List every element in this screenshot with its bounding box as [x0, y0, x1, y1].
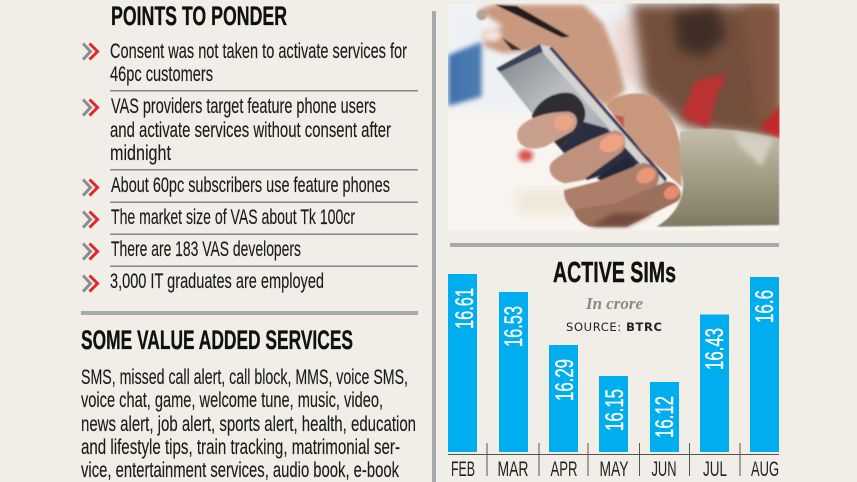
- bar: MAR: [499, 292, 528, 452]
- axis labels: MAR: [498, 458, 528, 481]
- sleeve: [657, 129, 779, 227]
- point: VAS providers: VAS providers target feature phone users: [111, 95, 376, 118]
- point: consent: 46pc customers: [110, 63, 213, 86]
- point: consent: Consent was not taken to activate services for: [110, 40, 407, 63]
- bar: JUL: 16.43: [701, 328, 729, 370]
- lower palm: [607, 93, 682, 187]
- fingers: [517, 112, 577, 149]
- panel: points to ponder: [83, 1, 418, 293]
- point: market size: [83, 206, 355, 229]
- point: developers: There are 183 VAS developers: [111, 238, 301, 261]
- bar: MAY: [599, 376, 629, 452]
- bar: JUN: 16.12: [651, 396, 679, 438]
- text block: services list: voice chat, game, welcome tune, music, video,: [81, 389, 383, 412]
- point: VAS providers: midnight: [110, 142, 171, 165]
- text block: services list: [81, 366, 416, 482]
- bar: JUL: [700, 314, 729, 452]
- text block: services list: news alert, job alert, sports alert, health, education: [81, 413, 416, 436]
- panel: some value added services: [81, 325, 416, 482]
- nails: [554, 114, 574, 131]
- photo: hands holding a smartphone: [448, 3, 782, 231]
- text block: services list: and lifestyle tips, train tracking, matrimonial ser-: [81, 436, 400, 459]
- phone: [496, 44, 667, 198]
- chart title: ACTIVE SIMs: [553, 257, 676, 289]
- bar: APR: [549, 345, 579, 452]
- axis labels: JUL: [703, 458, 727, 481]
- point: developers: [83, 238, 301, 261]
- point: market size: The market size of VAS about Tk 100cr: [111, 206, 355, 229]
- point: VAS providers: and activate services without consent after: [110, 119, 391, 142]
- upper hand: [478, 5, 625, 107]
- axis labels: MAY: [600, 458, 628, 481]
- point: IT graduates: [83, 270, 324, 293]
- bar: AUG: 16.6: [751, 290, 779, 323]
- bar: FEB: [448, 274, 479, 452]
- point: feature phones: About 60pc subscribers use feature phones: [111, 174, 390, 197]
- unit note: In crore: [585, 294, 643, 313]
- axis labels: APR: [550, 458, 578, 481]
- bar: AUG: [750, 277, 779, 452]
- bar: MAY: 16.15: [601, 389, 629, 431]
- axis labels: [451, 458, 779, 481]
- chart: active SIMs bar chart: [448, 257, 779, 481]
- point: feature phones: [83, 174, 390, 197]
- bar: APR: 16.29: [551, 359, 579, 401]
- axis labels: AUG: [751, 458, 779, 481]
- text block: services list: SMS, missed call alert, call block, MMS, voice SMS,: [81, 366, 408, 389]
- point: consent: [83, 40, 407, 86]
- heading: points to ponder: POINTS TO PONDER: [111, 1, 287, 31]
- point: VAS providers: [83, 95, 391, 165]
- axis labels: FEB: [451, 458, 475, 481]
- bar: MAR: 16.53: [500, 306, 528, 347]
- point: IT graduates: 3,000 IT graduates are employed: [110, 270, 324, 293]
- bar: FEB: 16.61: [451, 288, 479, 329]
- axis labels: JUN: [652, 458, 676, 481]
- source note: SOURCE: BTRC: [566, 320, 662, 334]
- text block: services list: vice, entertainment services, audio book, e-book: [81, 459, 399, 482]
- heading: some value added services: SOME VALUE ADDED SERVICES: [81, 325, 353, 355]
